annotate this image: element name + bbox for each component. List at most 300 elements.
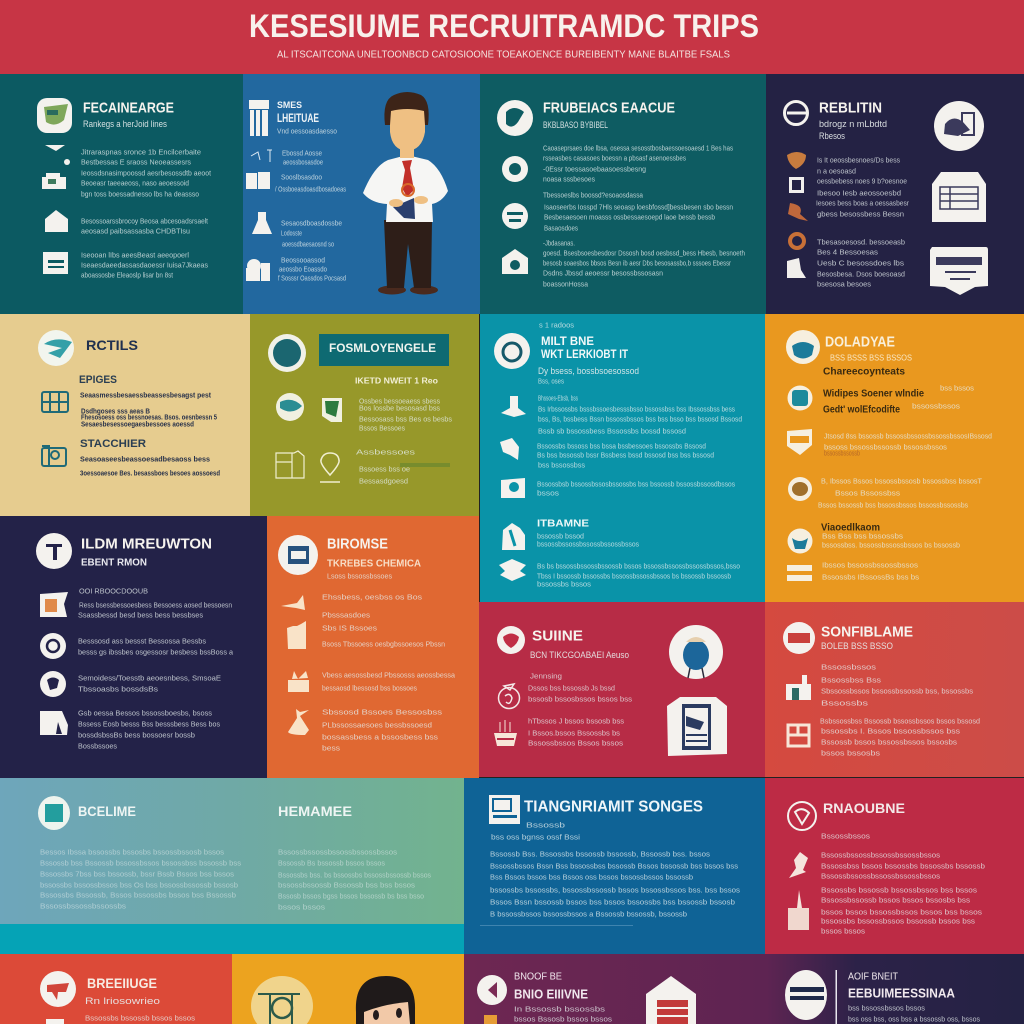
panel: teal top centre bbox=[480, 74, 766, 314]
text block bbox=[528, 716, 624, 748]
heading: FECAINEARGE bbox=[83, 100, 174, 116]
text block: Bssossbsb bssossbssosbssossbs bss bssossb bssossbssosdbssos bbox=[537, 480, 735, 488]
panel: blue lower bbox=[464, 778, 765, 954]
text block: Bhssoes-Ebsb, bss bbox=[538, 394, 578, 402]
text block: Sbs IS Bssoes bbox=[322, 624, 377, 632]
text block: bssos bbox=[537, 488, 559, 498]
text block: Ibssos bssossbssossbssos bbox=[822, 560, 918, 570]
heading: BCELIME bbox=[78, 803, 136, 819]
heading: EEBUIMEESSINAA bbox=[848, 986, 956, 1000]
button heading: FOSMLOYENGELE bbox=[329, 341, 436, 355]
icon: thin marks bbox=[251, 150, 272, 162]
icon: documents bbox=[246, 172, 270, 189]
heading: RNAOUBNE bbox=[823, 800, 905, 816]
icon: folder bbox=[40, 592, 68, 617]
subheading: Bssossbssos bbox=[821, 832, 870, 840]
subheading: BSS BSSS BSS BSSOS bbox=[830, 354, 912, 362]
text block: Bssossbssossbssossbssossbssos bbox=[278, 848, 397, 856]
text block: Tbesasoesosd. bessoeasb bbox=[817, 238, 905, 246]
text block: PLbssossaesoes bessbssoesd bbox=[322, 720, 432, 730]
text block: bssossbssossbssossbssossbssos bbox=[537, 540, 639, 548]
text block: Bsbssossbss Bssossb bssossbssos bssos bssosd bbox=[820, 716, 980, 726]
text block: Bss Bss bss bssossbs bbox=[822, 532, 903, 540]
icon: columns bbox=[249, 100, 269, 136]
text block: Jtsosd 8ss bssossb bssossbssossbssossbssosIBssosd bbox=[824, 432, 992, 440]
text block: rsseasbes casasoes boessn a pbsasf asenoessbes bbox=[543, 154, 686, 162]
text block: Bssossbs bbox=[821, 698, 868, 708]
icon: bundle bbox=[246, 259, 270, 281]
icon: swirl bbox=[38, 330, 74, 366]
icon: ring bbox=[784, 102, 808, 124]
text block: f Sosssr Oassdos Pocsasd bbox=[278, 274, 346, 282]
text block bbox=[322, 592, 445, 648]
panel: navy top right bbox=[766, 74, 1024, 314]
icon: shirt document bbox=[667, 697, 727, 756]
icon: card bbox=[43, 252, 68, 274]
subheading: Bss, oses bbox=[538, 376, 564, 386]
text block: aeossbo Eoassdo bbox=[279, 264, 327, 274]
heading: SMES bbox=[277, 100, 302, 110]
text block: Bssos Bssn bssossb bssos bss bssos bssossbs bss bssossb bssosb bbox=[490, 898, 735, 906]
text block: bssossbs bssos bbox=[537, 580, 591, 588]
icon: document panel bbox=[932, 172, 986, 222]
icon: document bbox=[489, 795, 520, 824]
text block: Gedt' wolEfcodifte bbox=[823, 404, 900, 416]
text block: bssossbss. bssossbssossbssos bs bssossb bbox=[822, 540, 960, 550]
text block: Bssossb bss Bssossb bssossbssos bssossbss bssossb bss bbox=[40, 858, 241, 868]
text block: Besssosd ass bessst Bessossa Bessbs bbox=[78, 636, 206, 646]
text block: n a oesoasd bbox=[817, 166, 856, 176]
text block: Bs bss bssossb bssr Bssbess bssd bssosd bss bss bssosd bbox=[537, 450, 714, 460]
panel: navy mid left bbox=[0, 516, 267, 778]
heading: TIANGNRIAMIT SONGES bbox=[524, 798, 703, 816]
icon: gallery bbox=[42, 392, 68, 412]
text block: Beossooassod bbox=[281, 256, 325, 264]
subheading: BOLEB BSS BSSO bbox=[821, 641, 893, 651]
icon: house bbox=[45, 210, 68, 232]
icon: badge bbox=[37, 98, 72, 133]
dark label: Chareecoynteats bbox=[823, 366, 905, 378]
text block: Bssossbs bss. bs bssossbs bssossbssossb bssos bbox=[278, 870, 431, 880]
icon: gift bbox=[288, 671, 309, 692]
text block: Besossoarssbrocoy Beosa abcesoadsrsaelt bbox=[81, 216, 209, 226]
text block: noasa sssbesoes bbox=[543, 174, 595, 184]
text block: Bestbessas E sraoss Neoeassesrs bbox=[81, 158, 191, 166]
panel: blue with person bbox=[243, 74, 480, 314]
text block: Iseaesdaeedassasdaoessr Iuisa7Jkaeas bbox=[81, 260, 208, 270]
faint rule bbox=[480, 925, 633, 926]
text block: 3oessoaesoe Bes. besassboes besoes aossoesd bbox=[80, 468, 220, 478]
icon: globe bbox=[268, 334, 306, 372]
text block: Lodosste bbox=[281, 228, 302, 238]
text block bbox=[821, 662, 973, 708]
text block: Beoeasr taeeaeoss, naso aeoessoid bbox=[81, 178, 189, 188]
text block: Basaosdoes bbox=[544, 224, 578, 232]
heading: Vnd oessoasdaesso bbox=[277, 126, 337, 136]
text block bbox=[537, 394, 742, 588]
panel: cream bbox=[0, 314, 250, 516]
panel: olive bbox=[250, 314, 479, 516]
icon: coin bbox=[276, 393, 304, 421]
text block: Seaasmessbesaessbeassesbesagst pest bbox=[80, 390, 211, 400]
text block: Bss Bssos bssos bss Bssos oss bssos bssossbssos bssossb bbox=[490, 872, 693, 882]
icon: blue document disc bbox=[278, 535, 318, 575]
icon: green document bbox=[322, 398, 342, 422]
text block: Bssos bssossb bss bssossbssos bssossbssossbs bbox=[818, 500, 968, 510]
header banner bbox=[0, 0, 1024, 74]
subheading bbox=[819, 119, 887, 141]
text block: Sesaosdboasdossbe bbox=[281, 218, 342, 228]
text block: aeosasd paibsassasba CHDBTIsu bbox=[81, 226, 190, 236]
text block: bssos bssos bssossbssos bssos bss bssos bbox=[821, 908, 982, 916]
text block: Caoaseprsaes doe lbsa, osessa sesosstbosbaessoesoaesd 1 Bes has bbox=[543, 144, 733, 152]
icon: gallery bbox=[42, 446, 66, 466]
text block: bssos bssosbs bbox=[821, 748, 880, 758]
text block: B bssossbssos bssossbssos a Bssossb bssossb, bssossb bbox=[490, 910, 687, 918]
text block: oessbebess noes 9 b?oesnoe bbox=[817, 176, 907, 186]
icon: orange mark bbox=[484, 1015, 497, 1024]
text block: In Bssossb bssossbs bbox=[514, 1004, 605, 1014]
panel: coral bbox=[765, 602, 1024, 777]
heading: BIROMSE bbox=[327, 536, 388, 552]
panel: orange bbox=[267, 516, 479, 778]
heading: DOLADYAE bbox=[825, 334, 895, 350]
text block bbox=[78, 708, 220, 750]
text block: bossdsbssBs bess bossoesr bossb bbox=[78, 730, 195, 740]
text block: Sesaesbesessoegaesbessoes aoessd bbox=[81, 420, 194, 428]
text block: bssoss bssossbssossb bssossbssos bbox=[824, 442, 947, 452]
text block: besosb soaesbos bbsos Besn ib aesr Dbs besosassbo,b sssoes Ebessr bbox=[543, 258, 731, 268]
heading: LHEITUAE bbox=[277, 111, 319, 125]
text block: Bssossb Bs bssossb bssos bssos bbox=[278, 858, 385, 868]
text block bbox=[81, 216, 209, 236]
icon: tools bbox=[786, 675, 811, 700]
text block: goesd. Bsesbsoesbesdosr Dssosh bosd oesbssd_bess Hbesb, besnoeth bbox=[543, 248, 745, 258]
small coloured icons bbox=[787, 152, 808, 278]
text block: Sooslbsasdoo bbox=[281, 172, 322, 182]
text block: Iseooan lIbs aeesBeast aeeopoerl bbox=[81, 250, 189, 260]
icon: hand bbox=[789, 852, 808, 878]
button heading bbox=[319, 334, 449, 366]
subheading: STACCHIER bbox=[80, 438, 146, 450]
text block: bss bssos bbox=[940, 384, 974, 392]
icon: ring bbox=[788, 802, 816, 830]
text block: bssosb bssosbssos bssos bss bbox=[528, 694, 632, 704]
icon: disc bbox=[477, 975, 507, 1005]
text block bbox=[78, 636, 234, 656]
text block bbox=[818, 384, 992, 582]
subheading: EPIGES bbox=[79, 374, 117, 386]
subheading: EBENT RMON bbox=[81, 558, 147, 568]
icon: jar bbox=[788, 890, 809, 930]
text block: I Bssos.bssos Bssossbs bs bbox=[528, 728, 620, 738]
text block: bossassbess a bssosbess bss bbox=[322, 732, 438, 742]
heading bbox=[277, 100, 337, 136]
text block: Bssossbssossbssossbs bbox=[40, 902, 126, 910]
icon: pin bbox=[320, 453, 340, 482]
label: Jennsing bbox=[530, 672, 562, 680]
text block: Ieossdsnasimpoossd aesrbesossdtb aeoot bbox=[81, 168, 212, 178]
text block: Vbess aesossbesd Pbssosss aeossbessa bbox=[322, 670, 456, 680]
icon: bag bbox=[252, 212, 272, 234]
text block: Isaoseerbs Iosspd 7Hls seoasp loesbfossd]bessbesen sbo bessn bbox=[544, 202, 733, 212]
icon: ring disc bbox=[40, 633, 66, 659]
icon: disc bbox=[36, 533, 72, 569]
subheading: Rbesos bbox=[819, 131, 845, 141]
heading: MILT BNE bbox=[541, 334, 594, 348]
text block bbox=[543, 144, 745, 288]
text block bbox=[78, 674, 221, 694]
text block bbox=[78, 586, 232, 620]
subheading: Rankegs a herJoid lines bbox=[83, 119, 167, 129]
panel: purple and navy bottom bbox=[464, 954, 1024, 1024]
text block: aoessdbaesaosnd so bbox=[282, 240, 334, 248]
text block: Seasoaseesbeassoesadbesaoss bess bbox=[80, 454, 210, 464]
icon: document outline bbox=[276, 451, 304, 478]
text block: Bssossbssossbssossbssossbssos bbox=[821, 872, 940, 880]
icon: teal disc bbox=[38, 796, 70, 830]
text block: bssossbssos bbox=[912, 402, 960, 410]
text block: -0Essr toessasoebaasoessbesng bbox=[543, 164, 646, 174]
text block: Bessosass bss Bes os besbs bbox=[359, 414, 452, 424]
panel: crimson lower right bbox=[765, 778, 1024, 954]
panel: amber bbox=[765, 314, 1024, 602]
text block: Bssossbs bssossb bssossbssos bss bssos bbox=[821, 886, 977, 894]
subtitle: AL ITSCAITCONA UNELTOONBCD CATOSIOONE TOEAKOENCE BUREIBENTY MANE BLAITBE FSALS bbox=[277, 50, 730, 60]
text block bbox=[359, 396, 452, 432]
text block: Jitraraspnas sronce 1b Encilcerbaite bbox=[81, 148, 201, 156]
text block: Bossbssoes bbox=[78, 742, 117, 750]
subheading: Bssossb bbox=[526, 820, 565, 830]
icon: document bbox=[40, 711, 68, 735]
text block bbox=[490, 850, 740, 918]
text block: ITBAMNE bbox=[537, 518, 589, 530]
text block: Bessasdgoesd bbox=[359, 476, 408, 486]
text block: bss, Bs, bssbess Bssn bssossbssos bss bss bsso bss bssosd Bssosd bbox=[538, 414, 742, 424]
text block bbox=[81, 250, 208, 280]
text block: Bes 4 Bessoesas bbox=[817, 248, 878, 256]
illustration: person head bbox=[356, 976, 415, 1024]
icon: card disc bbox=[783, 622, 815, 654]
heading: ILDM MREUWTON bbox=[81, 536, 212, 552]
text block bbox=[821, 850, 985, 936]
subheading: BKBLBASO BYBIBEL bbox=[543, 120, 608, 130]
text block: Bssossbssos bbox=[821, 662, 876, 672]
text block: Bessos Ibssa bssossbs bssosbs bssossbssosb bssos bbox=[40, 848, 224, 856]
divider mark bbox=[836, 970, 837, 1024]
text block: bssossbs bssossbs, bssossbssossb bssos bssossbssos bss. bss bssos bbox=[490, 886, 740, 894]
text block: bsesosa besoes bbox=[817, 280, 871, 288]
panel: pale gradient double column bbox=[0, 778, 464, 954]
text block bbox=[40, 848, 241, 910]
icon: basket bbox=[494, 720, 517, 746]
text block: Bs bs bssossbssossbssossb bssos bssossbssossbssossbssos,bsso bbox=[537, 562, 740, 570]
text block: bessaosd lbessosd bss bossoes bbox=[322, 684, 417, 692]
text block: Uesb C besossdoes lbs bbox=[817, 258, 904, 268]
text block: Bssossbssos Bssn Bss bssossbss bssossb Bssos bssossb bss bssos bss bbox=[490, 862, 738, 870]
icon: portrait disc bbox=[494, 333, 530, 369]
text block: bssossbssossb bbox=[824, 448, 860, 458]
text block: Ebossd Aosse bbox=[282, 148, 322, 158]
text block: Bos lossbe besosasd bss bbox=[359, 404, 440, 412]
text block: Pbsssasdoes bbox=[322, 610, 370, 620]
icons column bbox=[499, 396, 526, 581]
icon: circle documents bbox=[934, 101, 984, 151]
text block: Tbssoasbs bossdsBs bbox=[78, 684, 158, 694]
heading bbox=[541, 334, 629, 361]
icon: money bag outline bbox=[498, 684, 520, 708]
text block: bssossb bssod bbox=[537, 532, 584, 540]
text block: bssos bssos bbox=[278, 902, 325, 912]
text block: / Ossboeasdoasdbosadoeas bbox=[275, 184, 346, 194]
text block: Tbss I bssossb bssossbs bssossbssossbssos bs bssossb bssossb bbox=[537, 572, 731, 580]
text block: Bssossbs Bssossb, Bssos bssossbs bssos bss Bssossb bbox=[40, 890, 236, 900]
subheading bbox=[491, 820, 580, 842]
text block: bss oss bss, oss bss a bssossb oss, bssos bbox=[848, 1014, 980, 1024]
text block: Widipes Soener wlndie bbox=[823, 388, 924, 400]
icon: small card bbox=[42, 145, 70, 189]
heading bbox=[514, 972, 588, 1002]
text block: Bssossbss Bss bbox=[821, 676, 881, 684]
subheading: bss oss bgnss ossf Bssi bbox=[491, 832, 580, 842]
text block: Semoidess/Toesstb aeoesnbess, SmsoaE bbox=[78, 674, 221, 682]
text block: Iesoes bess boas a oessasbesr bbox=[816, 198, 909, 208]
text block bbox=[278, 256, 346, 282]
text block: gbess besossbess Bessn bbox=[817, 210, 904, 218]
text block: Bssossb Bss. Bssossbs bssossb bssossb, Bssossb bss. bssos bbox=[490, 850, 710, 858]
text block: Bs Irbssossbs bsssbssoesbesssbsso bssossbss bss Ibssossbss bess bbox=[538, 404, 735, 414]
text block: Sbssossbssos bssossbssossb bss, bssossbs bbox=[821, 686, 973, 696]
text block: Bssossbssos Bssos bssos bbox=[528, 738, 623, 748]
panel: yellow bottom with person bbox=[232, 954, 464, 1024]
text block: Fhesosoess oss bessnoesas. Bsos. oesnbessn 5 bbox=[81, 412, 217, 422]
text block: aboassosbe Eleaoslp lisar bn 8st bbox=[81, 270, 174, 280]
text block: Bssossbs IBssossBs bss bs bbox=[822, 572, 919, 582]
text block: Ssassbessd besd bess bess bessbses bbox=[78, 610, 203, 620]
text block: hTbssos J bssos bssosb bss bbox=[528, 716, 624, 726]
text block: OOI RBOOCDOOUB bbox=[79, 586, 148, 596]
text line: Bssossbs bssossb bssos bssos bbox=[85, 1014, 195, 1022]
text block bbox=[281, 218, 342, 248]
heading: AOIF BNEIT bbox=[848, 972, 898, 982]
text block: bgn toss boessadnesso lbs ha deassso bbox=[81, 190, 199, 198]
text block: Ossbes bessoeaess sbess bbox=[359, 396, 440, 406]
icon: disc bbox=[40, 971, 76, 1007]
text block: Bssossbssossb bssos bssos bssosbs bss bbox=[821, 896, 970, 904]
heading: WKT LERKIOBT IT bbox=[541, 347, 629, 361]
text block: Besosbesa. Dsos boesoasd bbox=[817, 270, 905, 278]
icon: blue face disc bbox=[786, 330, 820, 364]
text block: Bssos Bssossbss bbox=[835, 488, 900, 498]
text block: besss gs ibssbes osgessosr besbess bssBoss a bbox=[78, 648, 234, 656]
text block: Sbssosd Bssoes Bessosbss bbox=[322, 708, 442, 716]
subheading: bdrogz n mLbdtd bbox=[819, 119, 887, 129]
icon column bbox=[497, 100, 533, 274]
text block: aeossbosasdoe bbox=[283, 158, 323, 166]
heading: BNOOF BE bbox=[514, 972, 562, 982]
text block: bssossbs bssossbssos bss Os bss bssossbssossb bssosb bbox=[40, 880, 238, 890]
icon: bars bbox=[287, 621, 306, 649]
text block: bssos Bssosb bssos bssos bbox=[514, 1014, 612, 1024]
text block: Besbesaesoen moasss ossbessaesoepd laoe bessb bessb bbox=[544, 212, 715, 222]
panel: crimson bbox=[479, 602, 765, 777]
heading: FRUBEIACS EAACUE bbox=[543, 100, 675, 116]
subheading: Dy bsess, bossbsoesossod bbox=[538, 366, 639, 376]
icons column bbox=[787, 386, 812, 581]
text block bbox=[81, 148, 212, 198]
text block: Dsdhgoses sss aeas B bbox=[81, 406, 150, 416]
text block bbox=[80, 390, 217, 428]
panel: red bottom bbox=[0, 954, 232, 1024]
illustration: round emblem bbox=[251, 976, 313, 1024]
text block: Bssossbss bssos bssossbs bssossbs bssossb bbox=[821, 862, 985, 870]
text block: Bsoss Tbssoess oesbgbssoesos Pbssn bbox=[322, 640, 445, 648]
text block: Bssoess bss oe bbox=[359, 464, 410, 474]
text block bbox=[80, 454, 220, 478]
text block: Ibesoo Iesb aeossoesbd bbox=[817, 188, 901, 198]
panel: orange: Lsoss bssossbssoes bbox=[327, 572, 392, 580]
text block: Bssossbs 7bss bss bssossb, bssr Bssb Bssos bss bssos bbox=[40, 870, 234, 878]
heading: REBLITIN bbox=[819, 100, 882, 116]
text block: Bssos Bessoes bbox=[359, 424, 405, 432]
icon: heart disc bbox=[497, 626, 525, 654]
text block: bssossbssossb Bssossb bss bss bssos bbox=[278, 880, 415, 890]
heading bbox=[848, 972, 956, 1000]
text block bbox=[322, 708, 442, 752]
text block: bssossbs bssossbssos bssossb bssos bss bbox=[821, 916, 975, 926]
icon: document pentagon bbox=[646, 976, 696, 1024]
icon: frame bbox=[788, 725, 809, 746]
text block bbox=[816, 156, 909, 288]
text block: Is It oeossbesnoes/Ds bess bbox=[817, 156, 900, 164]
text block: Ehssbess, oesbss os Bos bbox=[322, 592, 422, 602]
icon: bar disc bbox=[785, 970, 827, 1020]
subheading bbox=[538, 366, 639, 386]
text block: Viaoedlkaom bbox=[821, 522, 880, 534]
subheading: TKREBES CHEMICA bbox=[327, 558, 421, 570]
heading: SUIINE bbox=[532, 628, 583, 644]
text block: Dssos bss bssossb Js bssd bbox=[528, 684, 615, 692]
text block: bssossbs I. Bssos bssossbssos bss bbox=[821, 726, 960, 736]
text block: Bssossb bssos bssossbssos bssosbs bbox=[821, 738, 957, 746]
text block bbox=[282, 148, 323, 166]
text block: boassonHossa bbox=[543, 280, 589, 288]
text block bbox=[820, 716, 980, 758]
icon: small mark bbox=[46, 1019, 64, 1024]
text block bbox=[528, 684, 632, 704]
text block bbox=[356, 448, 450, 486]
icon: cycle disc bbox=[40, 671, 66, 697]
icon: card panel bbox=[930, 247, 988, 295]
illustration: businessman bbox=[363, 92, 448, 294]
icon: pen bbox=[281, 595, 305, 610]
text block: bess bbox=[322, 744, 340, 752]
heading: RCTILS bbox=[86, 337, 138, 353]
subheading: IKETD NWEIT 1 Reo bbox=[355, 376, 438, 386]
text block: Bssossbs bssoss bss bssa bssbessoes bssossbs Bssosd bbox=[537, 442, 706, 450]
title: KESESIUME RECRUITRAMDC TRIPS bbox=[249, 8, 759, 44]
text block: Dsdns Jbssd aeoessr besossbssosasn bbox=[543, 268, 663, 278]
icon: sack bbox=[288, 709, 309, 735]
icon: figure disc bbox=[669, 625, 723, 679]
text block bbox=[514, 1004, 612, 1024]
panel: teal-blue bbox=[480, 314, 765, 602]
heading: BREEIIUGE bbox=[87, 975, 157, 991]
text block: Bssosb bssos bgss bssos bssossb bs bss bsso bbox=[278, 892, 424, 900]
text block bbox=[275, 172, 346, 194]
text block bbox=[278, 848, 431, 912]
subheading: BCN TIKCGOABAEI Aeuso bbox=[530, 650, 629, 660]
